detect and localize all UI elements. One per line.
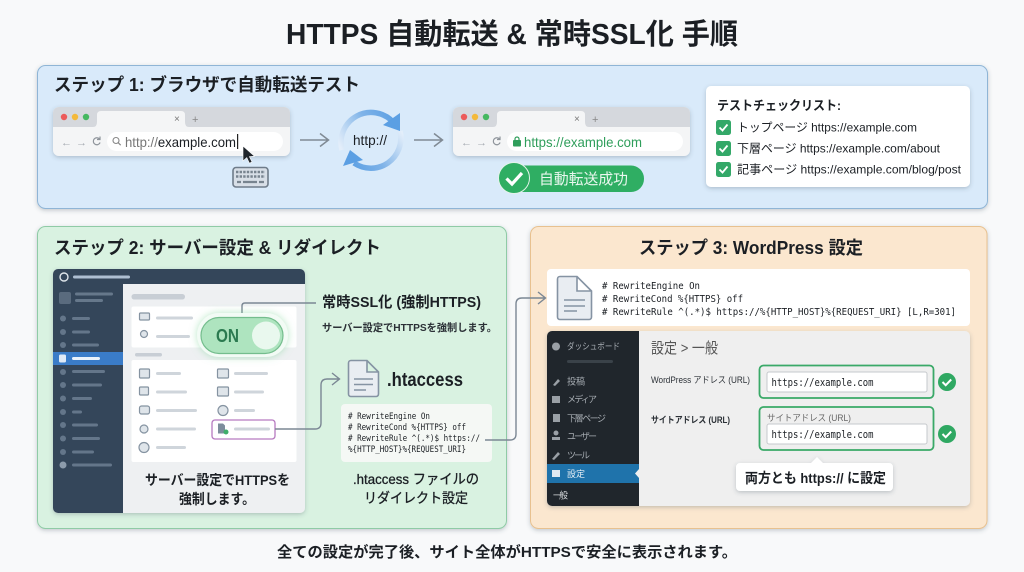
heading: step 2: ステップ 2: サーバー設定 & リダイレクト <box>54 237 381 258</box>
arrow: file item to htaccess <box>275 373 340 429</box>
browser: https address: × <box>574 114 580 125</box>
icon: redirect cycle: http:// <box>353 132 387 148</box>
field: wordpress address: https://example.com <box>772 377 874 389</box>
field: site address: サイトアドレス (URL) <box>651 415 730 425</box>
icon: document <box>558 276 592 320</box>
badge: redirect success: 自動転送成功 <box>539 171 628 188</box>
caption: htaccess <box>353 471 479 506</box>
code card <box>547 269 970 326</box>
wordpress sidebar: ツール <box>567 450 590 460</box>
arrow: code to card <box>485 292 546 440</box>
heading: always SSL: 常時SSL化 (強制HTTPS) <box>322 294 481 311</box>
field: wordpress address: WordPress アドレス (URL) <box>651 375 750 385</box>
wordpress sidebar: 設定 <box>567 469 585 479</box>
settings heading: 設定 > 一般 <box>651 340 718 357</box>
active menu item <box>53 352 123 365</box>
toggle: ON <box>197 313 288 357</box>
wordpress sidebar: メディア <box>567 394 597 404</box>
icon: document <box>348 360 378 396</box>
card: test checklist: トップページ https://example.com <box>737 120 917 134</box>
code: htaccess <box>341 404 492 462</box>
card: test checklist <box>706 86 970 187</box>
field: site address <box>651 407 956 450</box>
wordpress sidebar: ユーザー <box>567 432 597 442</box>
caption: server setting: 強制します。 <box>179 491 255 507</box>
caption: htaccess: リダイレクト設定 <box>364 490 468 506</box>
heading: step 3: ステップ 3: WordPress 設定 <box>639 238 863 258</box>
field: wordpress address <box>651 366 956 398</box>
wordpress sidebar: 投稿 <box>567 376 585 386</box>
footer note: 全ての設定が完了後、サイト全体がHTTPSで安全に表示されます。 <box>277 543 737 561</box>
code: htaccess: # RewriteCond %{HTTPS} off <box>348 423 466 433</box>
panel: step 2 server settings <box>38 226 506 528</box>
highlighted file item <box>212 420 275 439</box>
card: test checklist: 記事ページ https://example.com/blog/post <box>737 162 962 176</box>
wordpress sidebar: 下層ページ <box>567 414 606 424</box>
icon: cursor <box>243 146 254 163</box>
caption: server setting: サーバー設定でHTTPSを <box>145 472 290 488</box>
wordpress sidebar: 一般 <box>553 490 568 500</box>
toggle: ON: ON <box>216 326 239 346</box>
wordpress sidebar <box>547 331 639 506</box>
code card: # RewriteEngine On <box>602 281 700 292</box>
browser: http address: × <box>174 114 180 125</box>
text: force https note: サーバー設定でHTTPSを強制します。 <box>322 321 497 334</box>
heading: step 1: ステップ 1: ブラウザで自動転送テスト <box>54 74 360 95</box>
badge: redirect success <box>498 162 644 194</box>
browser: https address: → <box>476 137 487 149</box>
caption: htaccess: .htaccess ファイルの <box>353 471 479 487</box>
browser: http address: → <box>76 137 87 149</box>
arrow: to redirect <box>300 134 328 146</box>
caption: server setting <box>145 472 290 507</box>
code: htaccess: %{HTTP_HOST}%{REQUEST_URI} <box>348 445 466 455</box>
browser: https address: + <box>592 114 598 126</box>
browser: https address: ← <box>461 137 472 149</box>
browser: https address <box>453 107 690 156</box>
browser: http address: + <box>192 114 198 126</box>
wordpress settings mockup <box>547 331 970 506</box>
code: htaccess: # RewriteEngine On <box>348 412 430 422</box>
connector: toggle to label <box>242 303 316 317</box>
card: test checklist: テストチェックリスト: <box>717 98 841 113</box>
field: site address: サイトアドレス (URL) <box>767 413 851 423</box>
wordpress sidebar: ダッシュボード <box>567 340 620 352</box>
browser: http address <box>53 107 290 156</box>
panel: step 1 browser test <box>38 66 988 208</box>
server dashboard mockup <box>53 269 305 513</box>
code card: # RewriteCond %{HTTPS} off <box>602 294 743 305</box>
field: site address: https://example.com <box>772 429 874 441</box>
icon: redirect cycle <box>341 112 401 168</box>
code card: # RewriteRule ^(.*)$ https://%{HTTP_HOST}%{REQUEST_URI} [L,R=301] <box>602 307 956 318</box>
arrow: to https <box>414 134 442 146</box>
title: HTTPS 自動転送 & 常時SSL化 手順 <box>286 18 738 51</box>
icon: keyboard <box>233 168 268 187</box>
heading: .htaccess: .htaccess <box>387 369 463 391</box>
card: test checklist: 下層ページ https://example.com/about <box>737 142 941 156</box>
panel: step 3 wordpress settings <box>485 226 987 528</box>
callout: both https <box>736 457 893 491</box>
browser: http address: ← <box>61 137 72 149</box>
code: htaccess: # RewriteRule ^(.*)$ https:// <box>348 434 480 444</box>
browser: https address: https://example.com <box>524 134 642 150</box>
callout: both https: 両方とも https:// に設定 <box>745 470 886 486</box>
browser: http address: http://example.com <box>125 134 236 150</box>
